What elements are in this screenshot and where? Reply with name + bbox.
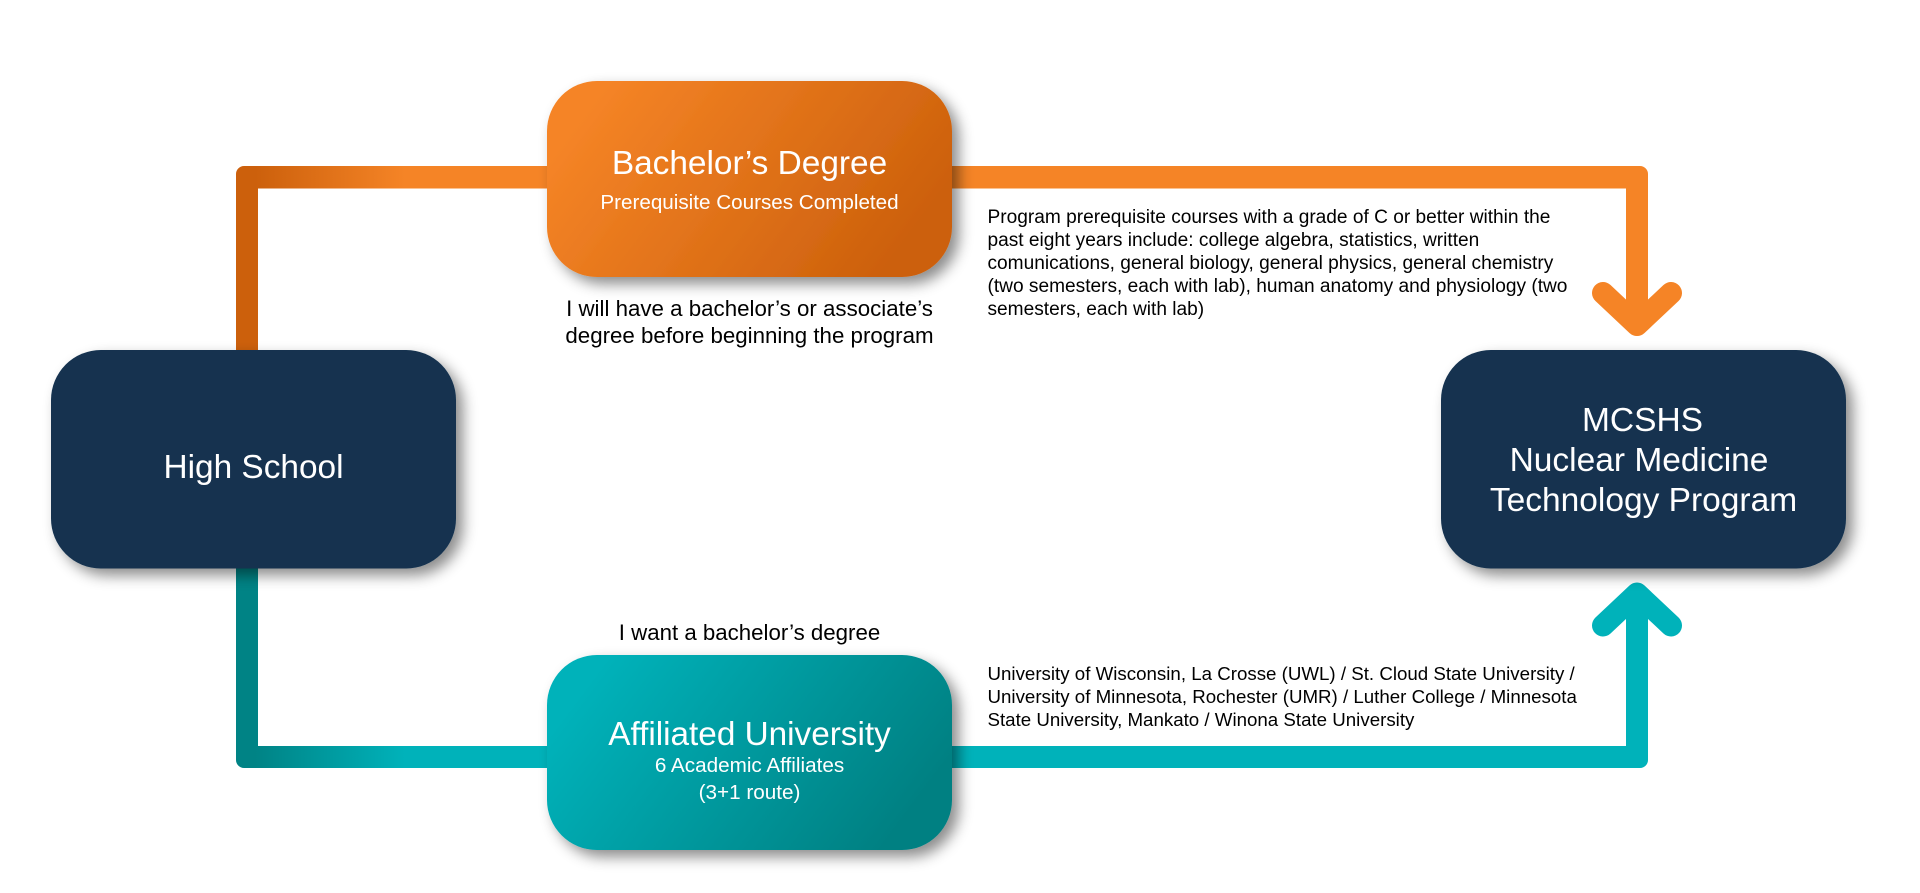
heading: MCSHS program: Technology Program [1490,482,1797,519]
text block: program prerequisites: semesters, each with lab) [988,299,1204,320]
subheading: academic affiliates [655,754,844,804]
heading: MCSHS program: Nuclear Medicine [1510,442,1768,479]
text block: affiliated universities list [988,663,1577,730]
note: bachelor's or associate's degree [565,296,934,348]
panel: bachelor's degree [547,81,952,277]
note: want a bachelor's degree: I want a bachelor’s degree [619,620,880,645]
note: bachelor's or associate's degree: degree before beginning the program [565,323,934,348]
panel: MCSHS program [1441,350,1846,568]
heading: MCSHS program [1490,402,1797,519]
text block: program prerequisites: comunications, general biology, general physics, general chemistry [988,253,1554,274]
heading: bachelor's degree: Bachelor’s Degree [612,145,887,182]
note: bachelor's or associate's degree: I will have a bachelor’s or associate’s [566,296,933,321]
subheading: academic affiliates: (3+1 route) [699,781,800,804]
text block: program prerequisites: Program prerequisite courses with a grade of C or better within the [988,207,1550,228]
subheading: prerequisite courses completed: Prerequisite Courses Completed [600,191,899,214]
arrow: affiliated university to program [940,594,1671,768]
panel: affiliated university [547,655,952,850]
arrow: bachelor's degree to program [940,166,1671,325]
heading: affiliated university: Affiliated University [608,716,891,753]
heading: high school: High School [163,449,344,486]
text block: program prerequisites: past eight years include: college algebra, statistics, written [988,230,1479,251]
connector: high school to affiliated university [236,560,560,768]
connector: high school to bachelor's degree [236,166,560,350]
text block: affiliated universities list: University of Wisconsin, La Crosse (UWL) / St. Cloud State University / [988,663,1576,684]
heading: MCSHS program: MCSHS [1582,402,1703,439]
panel: high school [51,350,456,568]
text block: affiliated universities list: State University, Mankato / Winona State University [988,709,1415,730]
text block: program prerequisites [988,207,1567,320]
subheading: academic affiliates: 6 Academic Affiliates [655,754,844,777]
text block: program prerequisites: (two semesters, each with lab), human anatomy and physiology (two [988,276,1567,297]
text block: affiliated universities list: University of Minnesota, Rochester (UMR) / Luther College / Minnesota [988,686,1577,707]
